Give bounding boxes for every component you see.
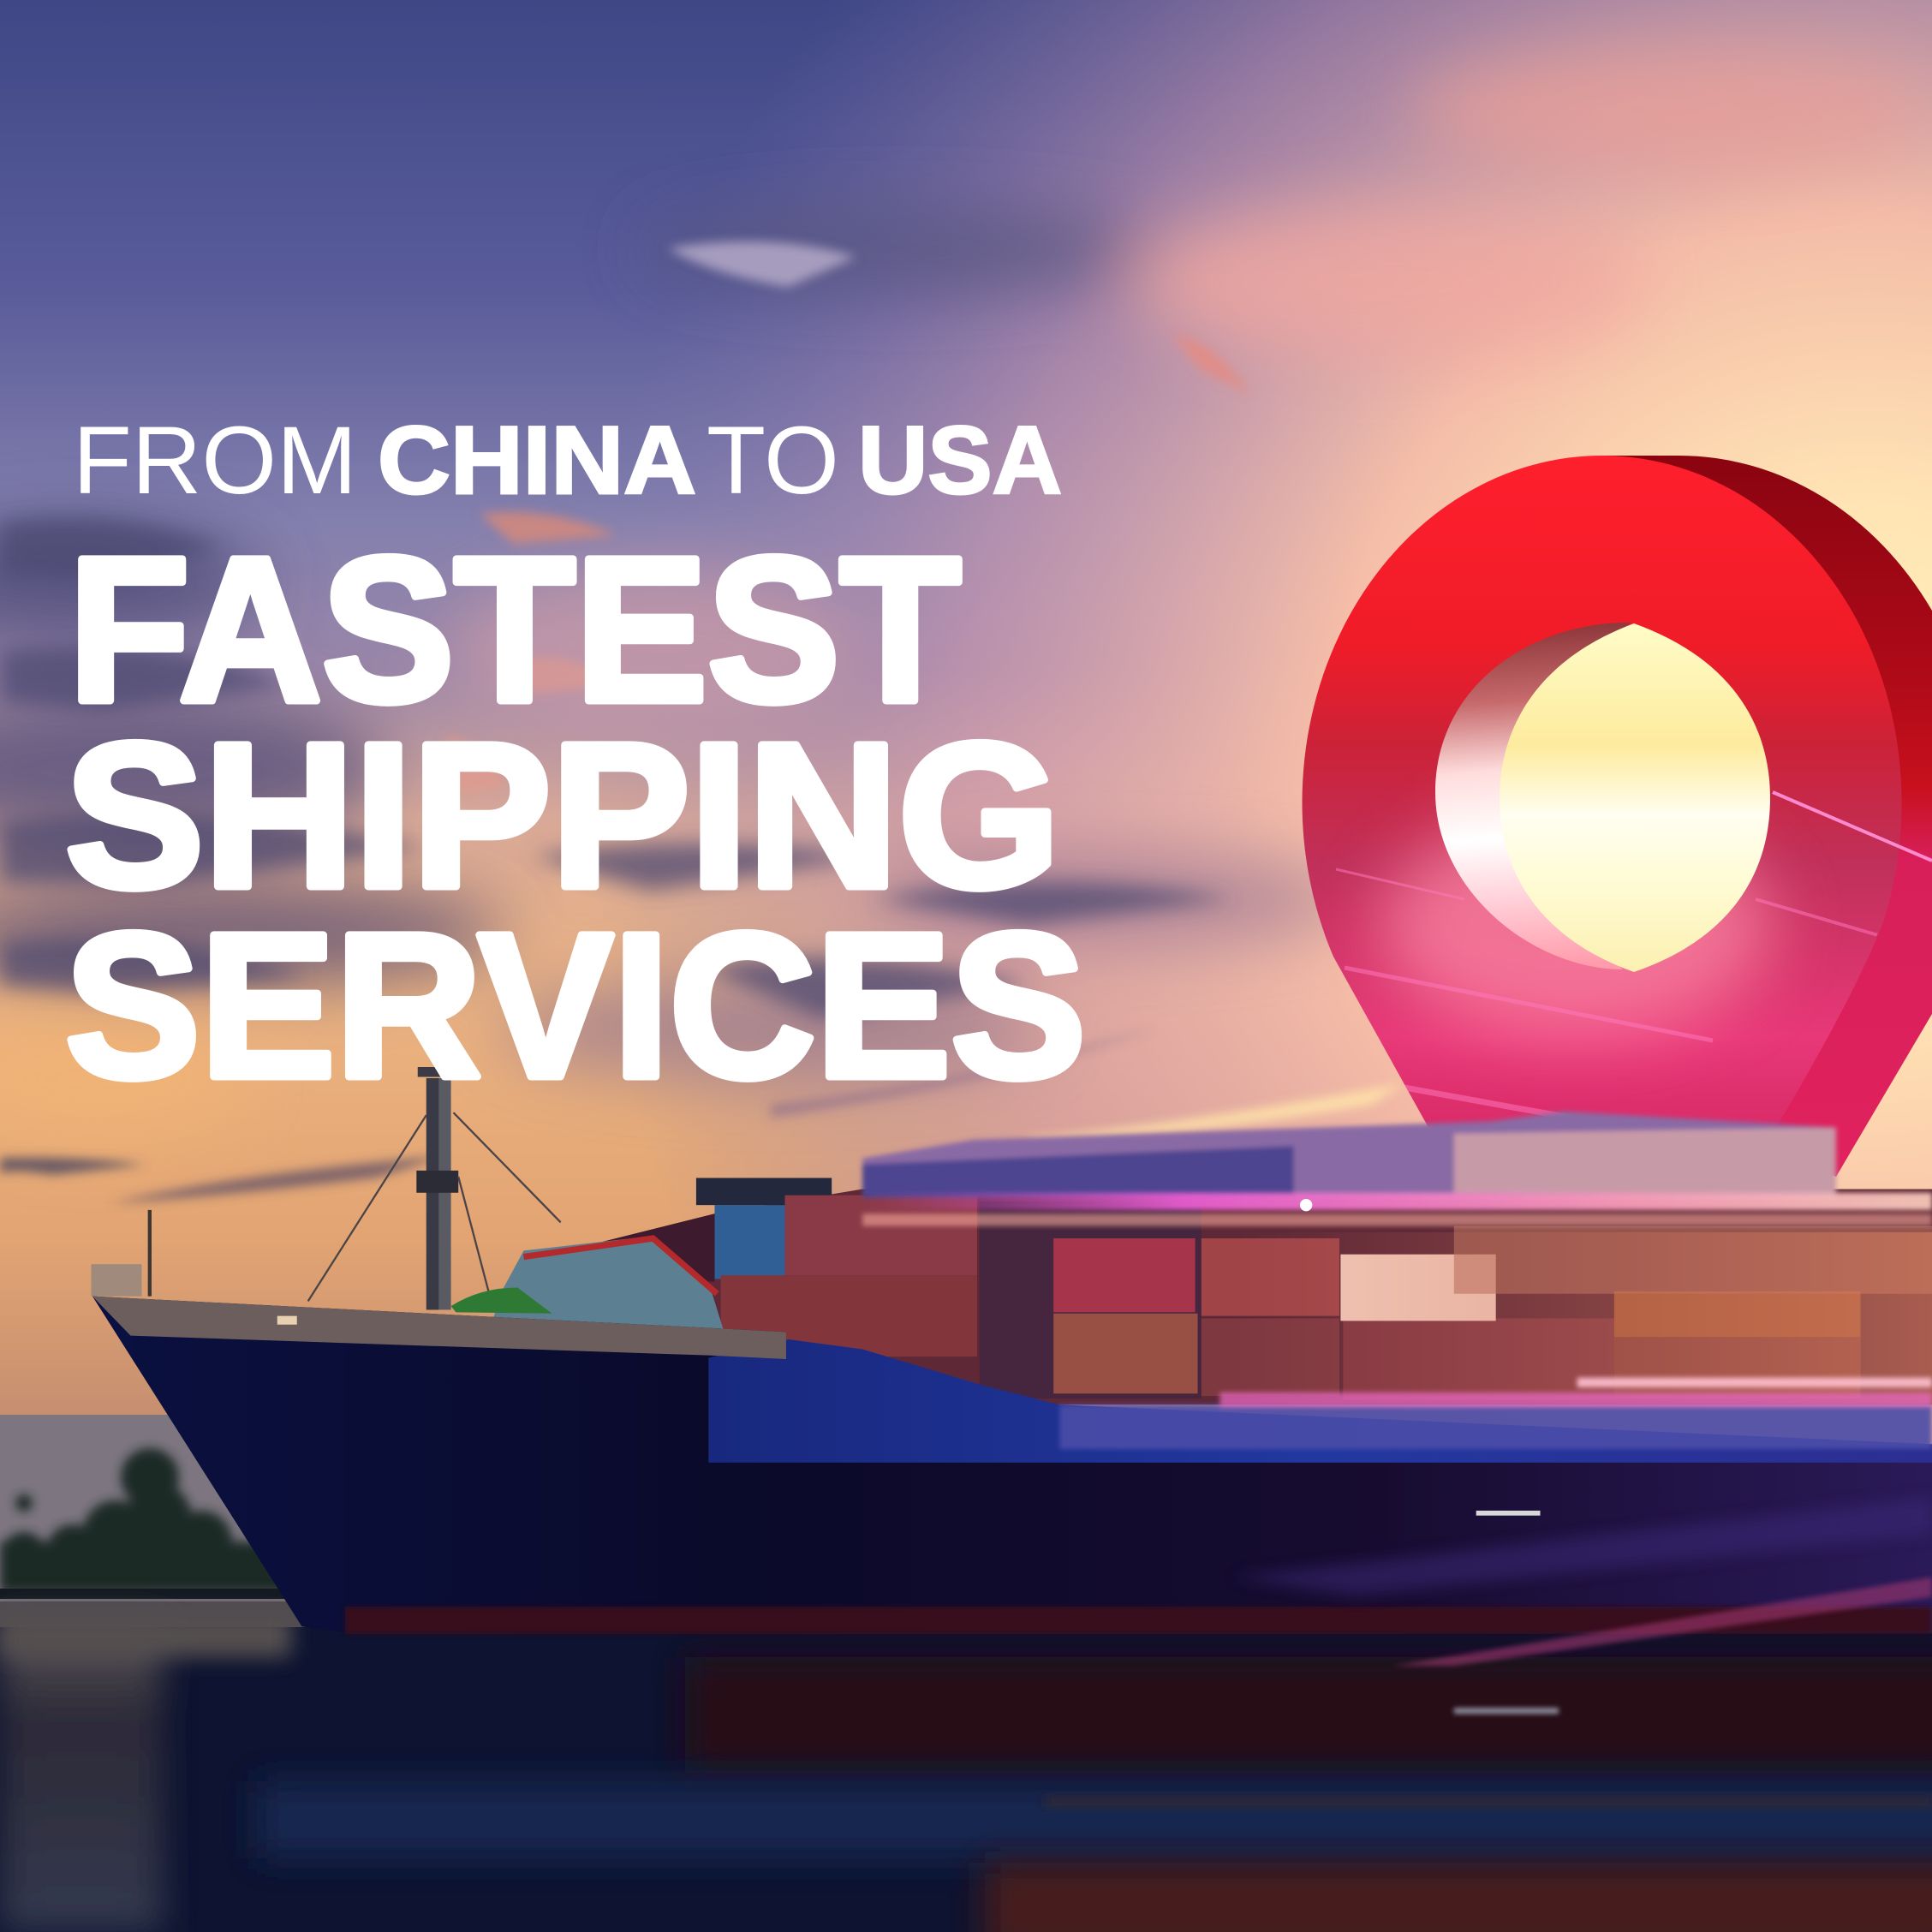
headline: [65, 407, 1086, 1120]
location pin: [1303, 456, 1932, 1177]
subheading: FROM: [73, 407, 357, 514]
main title: [65, 515, 1086, 1120]
water: [0, 1614, 1932, 1932]
mast with rigging: [91, 1067, 561, 1309]
cabin: [451, 1236, 724, 1333]
ship hull: [92, 1297, 1932, 1714]
main title: SERVICES: [65, 891, 1086, 1120]
subheading: CHINA: [378, 407, 696, 514]
pin back side: [1602, 456, 1932, 1177]
deck band: [92, 1297, 786, 1359]
main title: FASTEST: [69, 515, 961, 744]
glow around hole: [1379, 814, 1773, 1036]
subheading: USA: [858, 407, 1062, 514]
pin front face: [1303, 456, 1902, 1148]
hole showing sun: [1500, 623, 1770, 972]
light streak: [1773, 792, 1932, 861]
main title: SHIPPING: [65, 701, 1060, 930]
stacked containers: [517, 1112, 1932, 1404]
cargo ship: [91, 1067, 1932, 1714]
sky background: [0, 0, 1932, 1456]
subheading: TO: [707, 407, 839, 514]
trees and shore: [0, 1415, 308, 1653]
top container blur: [862, 1112, 1836, 1198]
inner crescent: [1435, 623, 1631, 969]
subheading: [73, 407, 1062, 514]
clouds: [0, 51, 1927, 1203]
